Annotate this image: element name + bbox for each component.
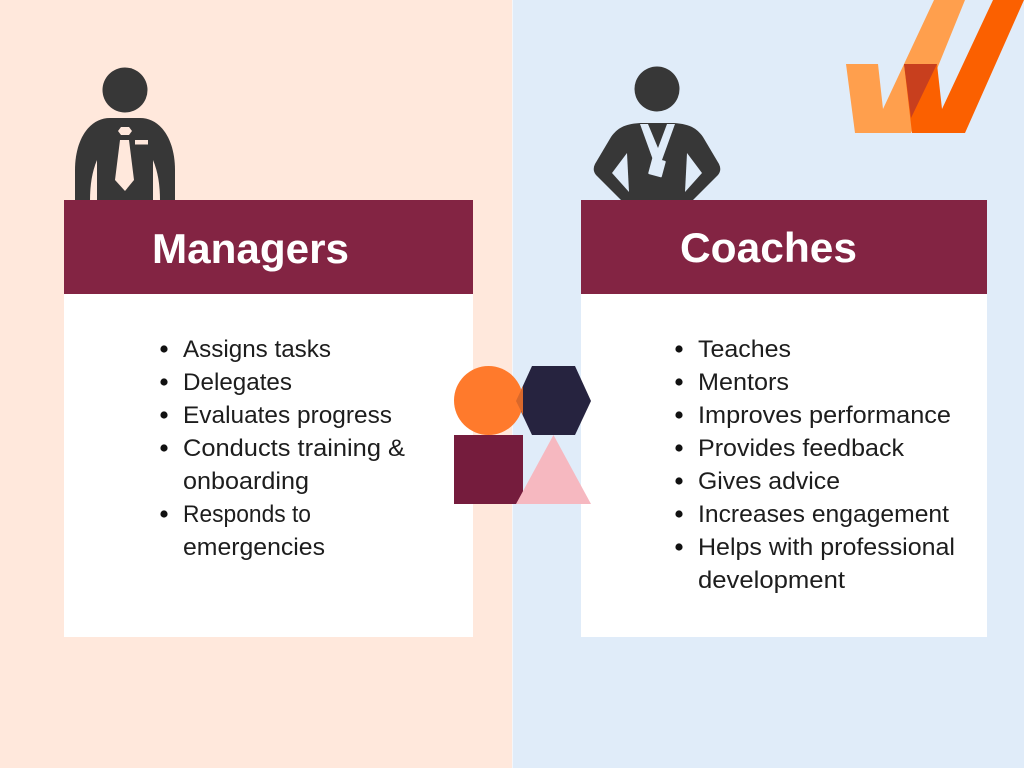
list: manager duties: Delegates bbox=[183, 369, 292, 396]
list: coach duties: Increases engagement bbox=[698, 501, 949, 528]
list: coach duties: development bbox=[698, 567, 845, 594]
panel: managers bbox=[64, 200, 473, 637]
shape: pink triangle bbox=[516, 435, 591, 504]
managers header bbox=[64, 200, 473, 294]
icon: manager figure bbox=[75, 68, 175, 201]
coaches header bbox=[581, 200, 987, 294]
shape: maroon square bbox=[454, 435, 523, 504]
panel: coaches bbox=[581, 200, 987, 637]
list: manager duties: Evaluates progress bbox=[183, 402, 392, 429]
list: manager duties: Assigns tasks bbox=[183, 336, 331, 363]
list: manager duties: Conducts training & bbox=[183, 435, 405, 462]
list: coach duties bbox=[675, 336, 955, 594]
list: coach duties: Improves performance bbox=[698, 402, 951, 429]
heading: Managers: Managers bbox=[152, 225, 349, 272]
heading: Coaches: Coaches bbox=[680, 224, 857, 271]
list: coach duties: Helps with professional bbox=[698, 534, 955, 561]
list: coach duties: Gives advice bbox=[698, 468, 840, 495]
decorative shapes cluster bbox=[454, 366, 591, 504]
shape: navy hexagon bbox=[516, 366, 591, 435]
list: manager duties: onboarding bbox=[183, 468, 309, 495]
list: manager duties: emergencies bbox=[183, 534, 325, 561]
logo: double check mark bbox=[846, 0, 1024, 133]
shape: circle and hexagon overlap bbox=[516, 386, 523, 415]
icon: coach figure bbox=[594, 66, 720, 201]
list: coach duties: Provides feedback bbox=[698, 435, 905, 462]
list: coach duties: Mentors bbox=[698, 369, 789, 396]
list: manager duties: Responds to bbox=[183, 501, 311, 528]
list: coach duties: Teaches bbox=[698, 336, 791, 363]
shape: orange circle bbox=[454, 366, 523, 435]
list: manager duties bbox=[160, 336, 405, 561]
